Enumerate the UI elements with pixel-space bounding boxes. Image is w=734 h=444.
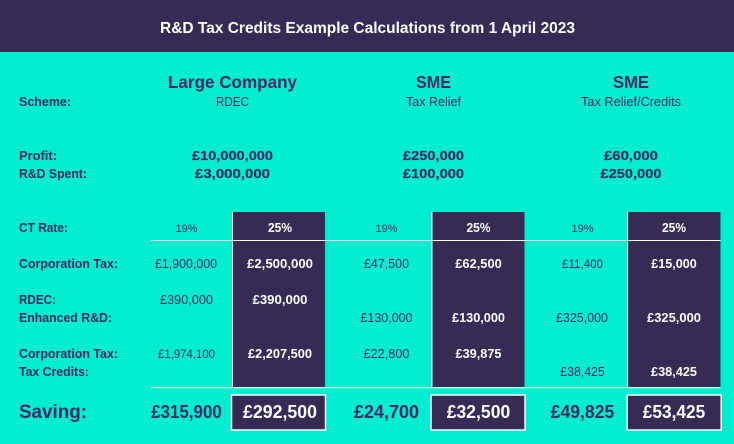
column heading: SME tax relief/credits xyxy=(581,72,681,181)
saving label: Saving: xyxy=(19,402,87,423)
column heading: SME tax relief/credits: £250,000 xyxy=(600,166,662,181)
row labels: Profit: xyxy=(19,149,57,163)
values: SME tax relief 25%: £62,500 xyxy=(455,257,502,271)
values: SME tax relief/credits 19%: 19% xyxy=(571,223,594,235)
values: SME tax relief 25%: 25% xyxy=(466,221,490,235)
column heading: large company: £10,000,000 xyxy=(192,148,273,163)
saving box: SME tax relief/credits 25% xyxy=(627,395,721,430)
values: large company 25%: £390,000 xyxy=(252,293,308,307)
row labels: Scheme: xyxy=(19,95,71,109)
title banner xyxy=(0,0,734,52)
values: SME tax relief 19%: £47,500 xyxy=(364,257,409,271)
values: large company 25% xyxy=(247,221,313,361)
values: SME tax relief 25%: £39,875 xyxy=(456,347,502,361)
values: large company 19%: 19% xyxy=(175,223,198,235)
column heading: SME tax relief: SME xyxy=(416,72,451,92)
column heading: SME tax relief/credits: Tax Relief/Credits xyxy=(581,95,681,109)
highlighted 25% column: SME tax relief/credits xyxy=(628,212,720,387)
values: SME tax relief/credits 19% xyxy=(556,223,608,379)
saving: large company 19%: £315,900 xyxy=(151,402,222,422)
row labels xyxy=(19,95,118,379)
values: large company 19%: £1,974,100 xyxy=(158,347,215,361)
values: large company 25%: £2,500,000 xyxy=(247,257,313,271)
values: SME tax relief/credits 25%: 25% xyxy=(662,221,686,235)
column heading: large company: RDEC xyxy=(216,95,249,109)
column heading: SME tax relief/credits: SME xyxy=(613,72,649,92)
values: SME tax relief/credits 25%: £325,000 xyxy=(647,311,701,325)
row labels: CT Rate: xyxy=(19,221,68,235)
row labels: Corporation Tax: xyxy=(19,347,118,361)
column heading: large company: Large Company xyxy=(168,72,297,92)
row labels: RDEC: xyxy=(19,293,56,307)
saving: SME tax relief/credits 19%: £49,825 xyxy=(551,402,614,422)
values: SME tax relief 19% xyxy=(360,223,413,361)
values: SME tax relief/credits 19%: £38,425 xyxy=(560,365,605,379)
values: SME tax relief/credits 25%: £15,000 xyxy=(651,257,697,271)
saving box: large company 25%: £292,500 xyxy=(243,402,317,422)
values: large company 25%: 25% xyxy=(268,221,292,235)
row labels: Corporation Tax: xyxy=(19,257,118,271)
values: large company 19%: £1,900,000 xyxy=(155,257,217,271)
column heading: large company xyxy=(168,72,297,181)
highlighted 25% column: large company xyxy=(233,212,325,387)
row labels: Enhanced R&D: xyxy=(19,311,112,325)
column heading: SME tax relief/credits: £60,000 xyxy=(604,148,658,163)
title banner: R&D Tax Credits Example Calculations from 1 April 2023 xyxy=(160,20,575,37)
values: large company 19%: £390,000 xyxy=(160,293,213,307)
row labels: R&D Spent: xyxy=(19,167,87,181)
saving: SME tax relief 19%: £24,700 xyxy=(354,402,419,422)
highlighted 25% column: SME tax relief xyxy=(432,212,524,387)
values: SME tax relief 19%: 19% xyxy=(375,223,398,235)
values: large company 25%: £2,207,500 xyxy=(248,347,312,361)
saving box: SME tax relief 25% xyxy=(431,395,525,430)
column heading: SME tax relief: Tax Relief xyxy=(406,95,462,109)
column heading: SME tax relief: £100,000 xyxy=(403,166,464,181)
values: SME tax relief/credits 25%: £38,425 xyxy=(651,365,697,379)
saving box: large company 25% xyxy=(232,395,326,430)
values: SME tax relief 19%: £22,800 xyxy=(364,347,410,361)
values: large company 19% xyxy=(155,223,217,361)
column heading: large company: £3,000,000 xyxy=(195,166,270,181)
saving box: SME tax relief 25%: £32,500 xyxy=(447,402,510,422)
row labels: Tax Credits: xyxy=(19,365,89,379)
values: SME tax relief/credits 19%: £11,400 xyxy=(562,257,603,271)
saving box: SME tax relief/credits 25%: £53,425 xyxy=(643,402,705,422)
values: SME tax relief 25%: £130,000 xyxy=(452,311,505,325)
column heading: SME tax relief: £250,000 xyxy=(403,148,464,163)
values: SME tax relief 19%: £130,000 xyxy=(360,311,413,325)
column heading: SME tax relief xyxy=(403,72,464,181)
values: SME tax relief/credits 19%: £325,000 xyxy=(556,311,608,325)
values: SME tax relief/credits 25% xyxy=(647,221,701,379)
values: SME tax relief 25% xyxy=(452,221,505,361)
